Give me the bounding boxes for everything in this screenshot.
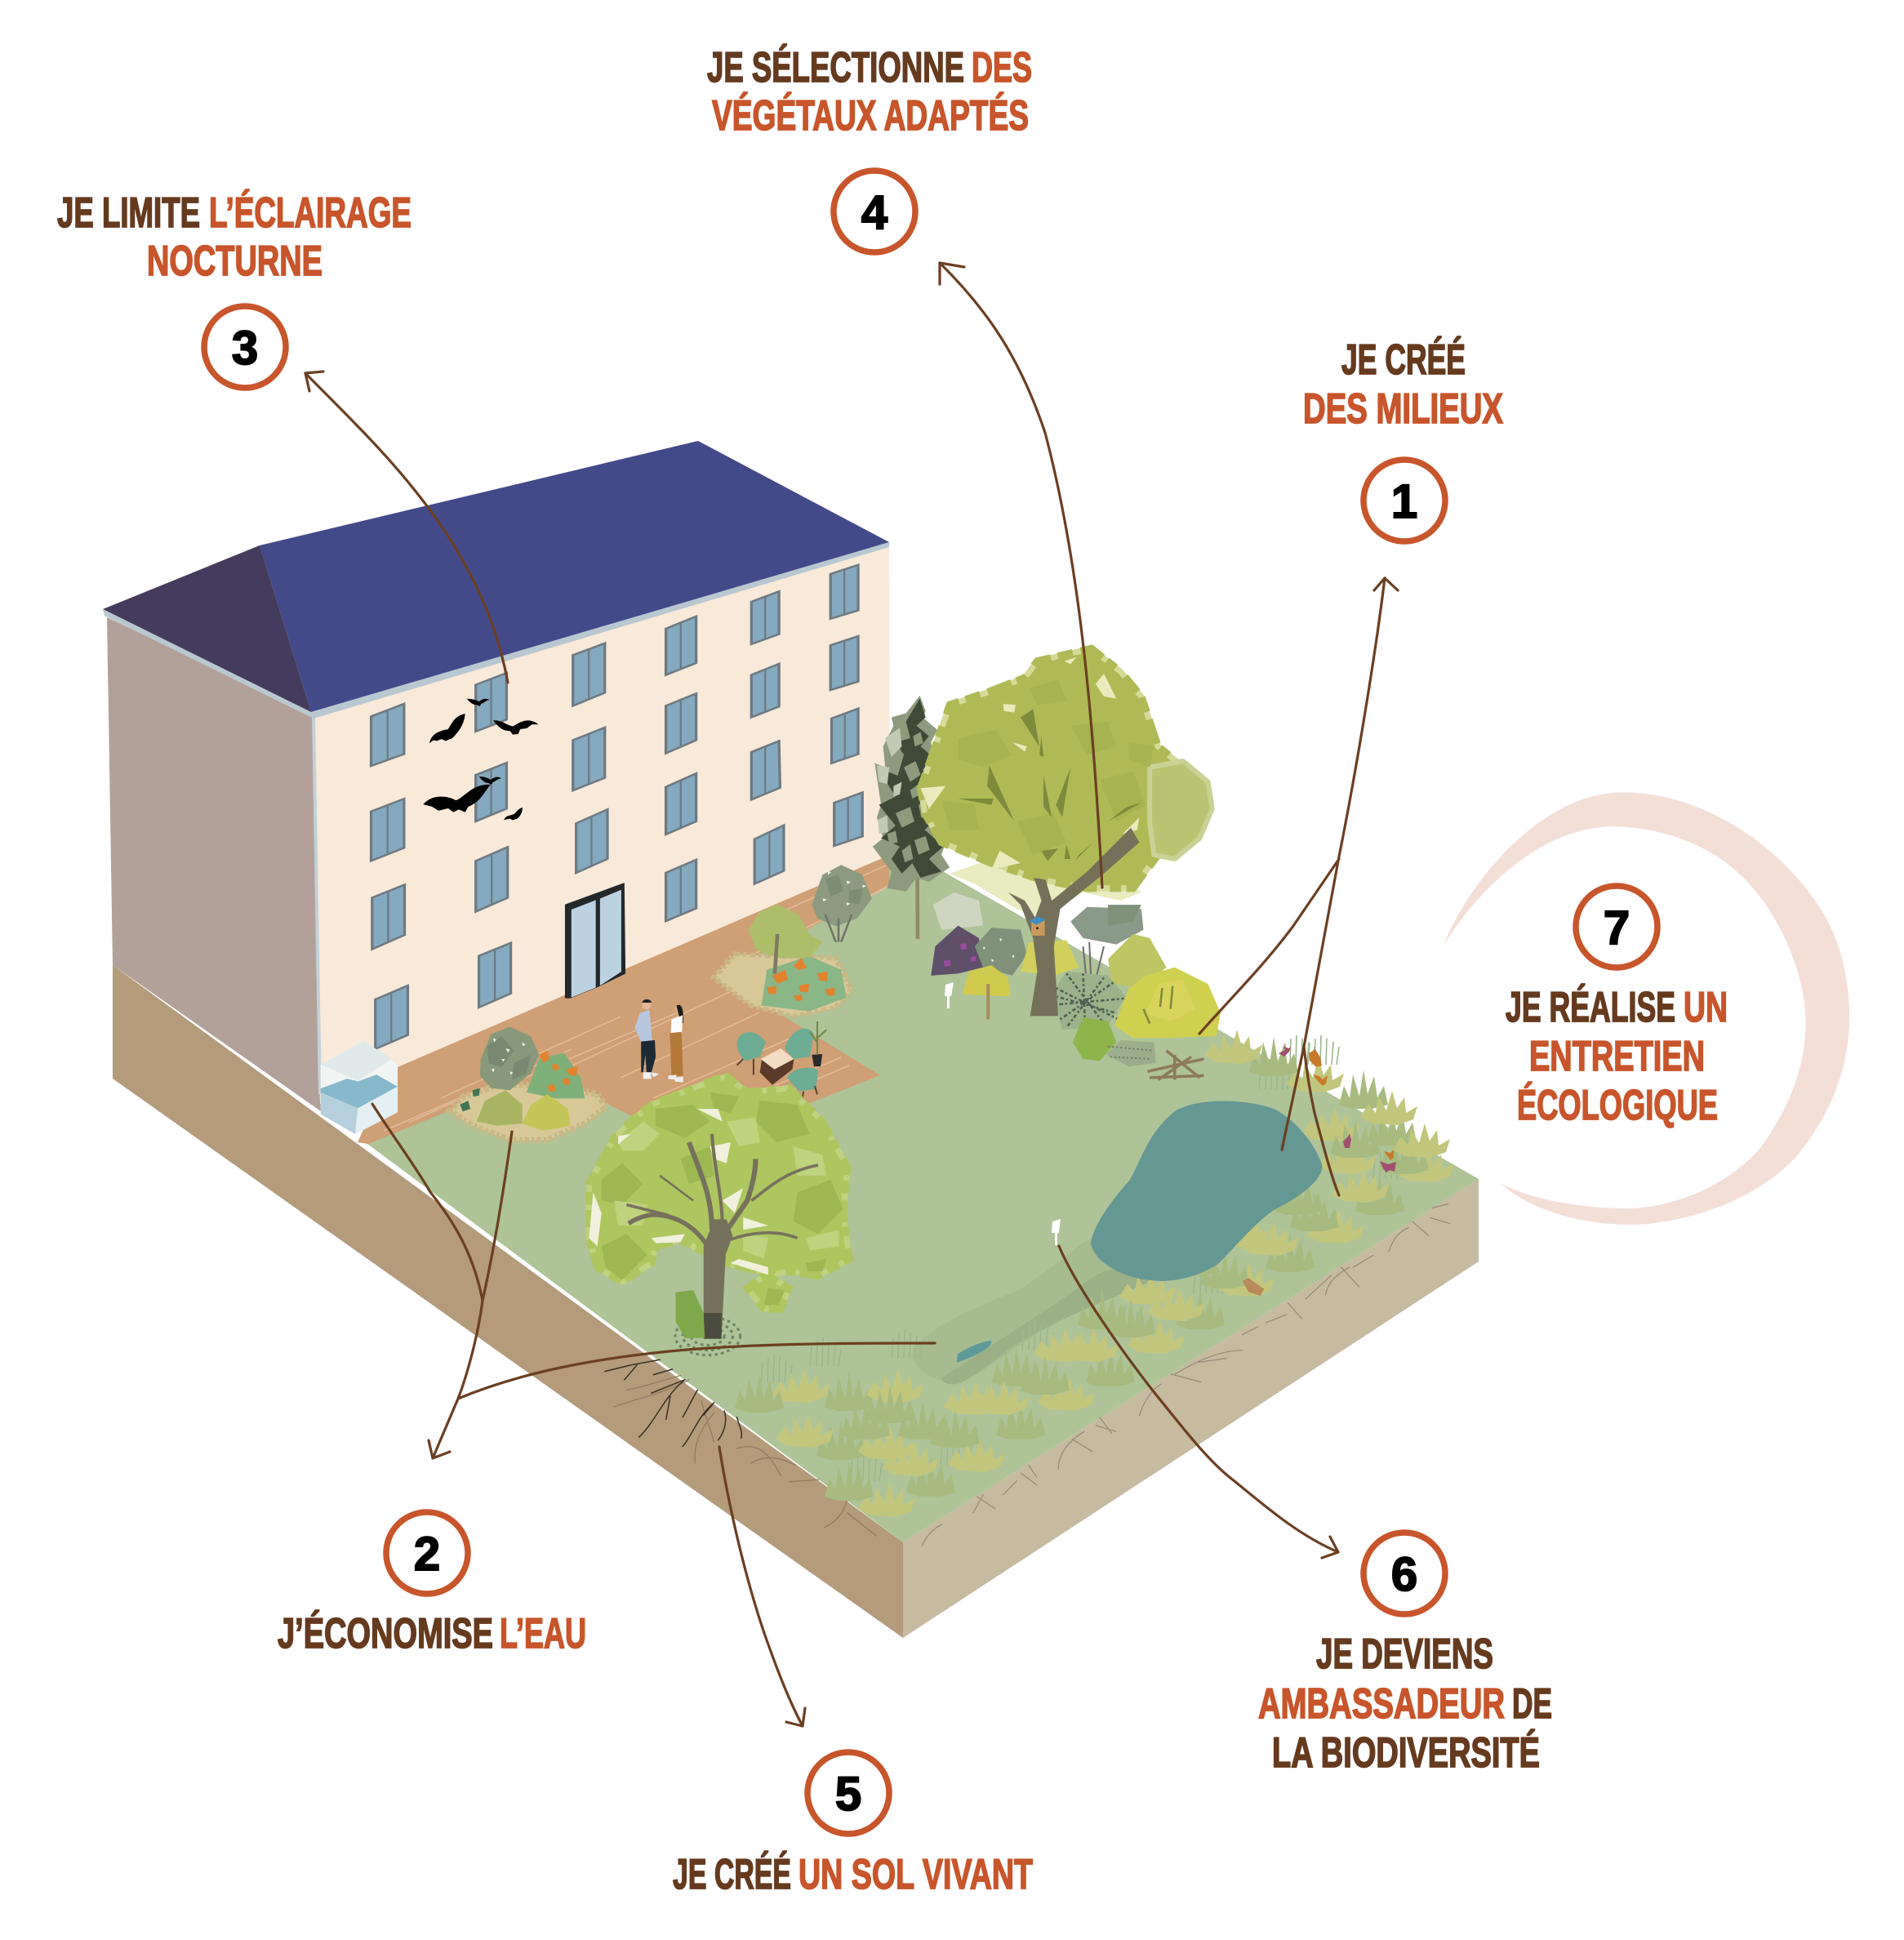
grey shrub	[480, 1027, 539, 1090]
lawn	[364, 841, 1479, 1542]
heading 1	[1303, 336, 1503, 433]
badge 7: 7	[1604, 901, 1630, 954]
badge 7	[1576, 886, 1657, 968]
crown dark patches	[602, 1092, 843, 1305]
crown highlights	[921, 657, 1139, 870]
wood deck	[358, 849, 889, 1145]
flower bed near tank	[450, 1027, 607, 1140]
soil left face	[113, 965, 903, 1638]
crescent behind 7	[1444, 792, 1849, 1225]
soil right face	[903, 1179, 1479, 1638]
small tree in lawn	[589, 1076, 849, 1355]
pond	[1091, 1101, 1323, 1281]
butterflies	[1279, 1046, 1396, 1172]
step 3	[57, 189, 411, 388]
heading 6: DE	[1512, 1680, 1552, 1728]
arrow 2	[372, 1104, 935, 1458]
badge 5	[807, 1752, 889, 1834]
insect hotel	[1243, 1278, 1264, 1296]
crown edge pieces	[589, 1076, 849, 1309]
badge 3: 3	[232, 322, 258, 375]
badge 2: 2	[414, 1528, 440, 1581]
big tree	[921, 648, 1212, 1016]
heading 1: JE CRÉÉ	[1341, 336, 1466, 384]
grey tree	[812, 865, 872, 926]
trunk	[704, 1219, 732, 1338]
trunk	[1008, 828, 1139, 1016]
large yellow shrub	[1114, 968, 1221, 1038]
heading 7: UN	[1684, 984, 1728, 1031]
step 6	[1258, 1533, 1552, 1777]
pale hedge	[933, 892, 983, 930]
mulch	[450, 1084, 607, 1140]
step 5	[673, 1752, 1033, 1898]
woman	[668, 1005, 683, 1083]
heading 3: JE LIMITE	[57, 189, 200, 237]
front facade	[314, 544, 890, 1104]
dark leaves	[460, 1088, 480, 1111]
dark scribble shrub	[1053, 972, 1126, 1030]
grey herb	[1106, 1040, 1156, 1066]
conifer	[873, 696, 950, 939]
heading 7: ÉCOLOGIQUE	[1517, 1082, 1718, 1129]
building	[103, 441, 890, 1115]
grass meadow	[735, 1030, 1454, 1517]
crown dark strokes	[958, 709, 1141, 861]
lower pale foliage	[950, 859, 1141, 917]
shrubs behind tree	[931, 892, 1221, 1079]
crown pale rim	[921, 648, 1210, 888]
arrow 3	[305, 372, 508, 683]
left wall	[107, 617, 327, 1115]
heading 3: NOCTURNE	[147, 238, 323, 285]
roots under tree	[605, 1359, 876, 1536]
grey shrub right	[1070, 907, 1144, 945]
water tank	[321, 1041, 398, 1134]
orange flowering plants	[527, 1052, 585, 1098]
ground block	[113, 841, 1479, 1638]
badge 4: 4	[861, 186, 887, 239]
grey green shrub	[975, 928, 1027, 976]
heading 5: JE CRÉÉ	[673, 1851, 791, 1898]
heading 7	[1506, 984, 1728, 1129]
roof main	[260, 441, 889, 712]
green shrub	[676, 1290, 705, 1338]
step 2	[278, 1512, 586, 1657]
heading 5: UN SOL VIVANT	[799, 1851, 1033, 1898]
grey foliage	[1108, 905, 1141, 926]
heading 2: L’EAU	[500, 1610, 586, 1657]
heading 4	[707, 44, 1032, 140]
arrow 6	[1059, 1246, 1338, 1558]
yellow tree	[748, 905, 822, 958]
crown edge pieces	[921, 648, 1210, 888]
arrow 4	[940, 263, 1102, 888]
deck planks	[384, 865, 888, 1131]
mulch	[714, 954, 852, 1017]
orange flowers	[767, 958, 834, 1001]
flower bed near lawn	[714, 865, 872, 1017]
crown rim	[589, 1076, 849, 1309]
arrow 5	[719, 1447, 805, 1726]
green plants	[762, 956, 847, 1012]
windows	[371, 565, 862, 1049]
branches	[629, 1215, 708, 1247]
crown pale highlights	[589, 1109, 768, 1275]
heading 4: JE SÉLECTIONNE	[707, 44, 964, 91]
yellow green bush	[477, 1090, 523, 1126]
corner edge	[314, 715, 320, 1094]
heading 6	[1258, 1631, 1552, 1777]
heading 3	[57, 189, 411, 285]
step 4	[707, 44, 1032, 252]
yellow small tree	[963, 965, 1010, 996]
heading 4: DES	[972, 44, 1032, 91]
light green shrub	[1073, 1017, 1116, 1061]
people	[635, 999, 683, 1083]
signposts	[945, 982, 1061, 1245]
yellow shrub behind trunk	[1021, 941, 1079, 976]
conifer dark blotches	[877, 699, 944, 878]
heading 5	[673, 1851, 1033, 1898]
swale shadow	[912, 1239, 1151, 1384]
heading 6: LA BIODIVERSITÉ	[1272, 1729, 1540, 1777]
heading 6: JE DEVIENS	[1316, 1631, 1493, 1678]
badge 5: 5	[835, 1768, 861, 1821]
heading 6: AMBASSADEUR	[1258, 1680, 1505, 1728]
badge 1: 1	[1391, 475, 1417, 528]
terrace	[358, 849, 889, 1145]
pond overflow water	[957, 1341, 991, 1362]
roots right face	[922, 1204, 1450, 1546]
bats	[423, 699, 538, 820]
heading 2: J’ÉCONOMISE	[278, 1610, 493, 1657]
outdoor furniture	[737, 1021, 826, 1103]
table	[760, 1050, 794, 1085]
purple shrub	[931, 926, 983, 976]
step 1	[1303, 336, 1503, 541]
badge 6: 6	[1391, 1548, 1417, 1601]
badge 3	[204, 306, 286, 388]
yellow bush	[523, 1094, 570, 1131]
conifer mid blotches	[887, 732, 933, 862]
crown right lobe	[1150, 761, 1212, 859]
badge 4	[834, 171, 915, 252]
badge 6	[1363, 1533, 1445, 1614]
crown shade patches	[941, 680, 1154, 855]
yellow green shrub	[1108, 934, 1167, 988]
conifer outer foliage	[873, 696, 950, 892]
birdhouse	[1029, 916, 1046, 936]
badge 2	[386, 1512, 468, 1594]
badge 1	[1363, 460, 1445, 541]
heading 1: DES MILIEUX	[1303, 385, 1503, 433]
heading 7: JE RÉALISE	[1506, 984, 1675, 1031]
heading 4: VÉGÉTAUX ADAPTÉS	[712, 92, 1029, 140]
roof hip	[103, 545, 311, 712]
man	[635, 999, 659, 1079]
entrance door	[565, 883, 625, 999]
ground cover under tree	[675, 1317, 741, 1355]
eaves	[103, 542, 889, 719]
step 7	[1506, 886, 1728, 1129]
heading 7: ENTRETIEN	[1529, 1033, 1705, 1080]
crown light patches	[614, 1117, 839, 1259]
branch pile	[1148, 1051, 1203, 1079]
conifer light edge	[877, 728, 902, 834]
potted plant	[812, 1054, 822, 1066]
arrow 1	[1199, 578, 1398, 1195]
heading 3: L’ÉCLAIRAGE	[209, 189, 411, 237]
